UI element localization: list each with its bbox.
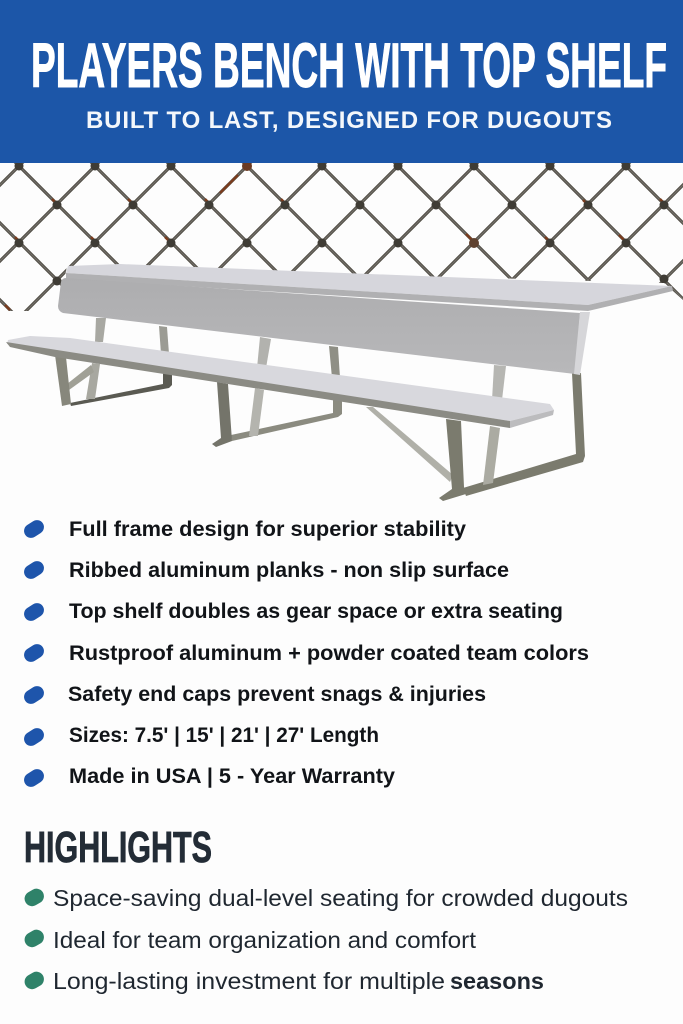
header banner — [0, 0, 683, 163]
feature 5: Safety end caps prevent snags & injuries — [68, 683, 486, 706]
highlight 2: Ideal for team organization and comfort — [53, 927, 477, 953]
bench illustration — [6, 264, 673, 501]
feature 4: Rustproof aluminum + powder coated team colors — [69, 642, 589, 665]
feature list — [21, 517, 589, 790]
feature 1: Full frame design for superior stability — [69, 518, 466, 541]
highlights heading: HIGHLIGHTS — [24, 823, 212, 872]
feature 2: Ribbed aluminum planks - non slip surface — [69, 559, 509, 582]
highlight 3: seasons — [450, 968, 544, 994]
feature 6: Sizes: 7.5' | 15' | 21' | 27' Length — [69, 724, 379, 747]
feature 7: Made in USA | 5 - Year Warranty — [69, 765, 395, 788]
highlight 1: Space-saving dual-level seating for crowded dugouts — [53, 885, 628, 911]
highlights list — [22, 885, 628, 994]
bench rear legs and frames — [55, 318, 585, 501]
chain-link fence — [0, 160, 683, 315]
highlight 3: Long-lasting investment for multiple — [53, 968, 445, 994]
highlight 3 — [22, 968, 544, 994]
back panel — [58, 278, 590, 375]
seat — [6, 336, 554, 428]
top shelf — [66, 264, 673, 311]
feature 3: Top shelf doubles as gear space or extra seating — [69, 600, 563, 623]
subtitle: BUILT TO LAST, DESIGNED FOR DUGOUTS — [86, 107, 612, 134]
